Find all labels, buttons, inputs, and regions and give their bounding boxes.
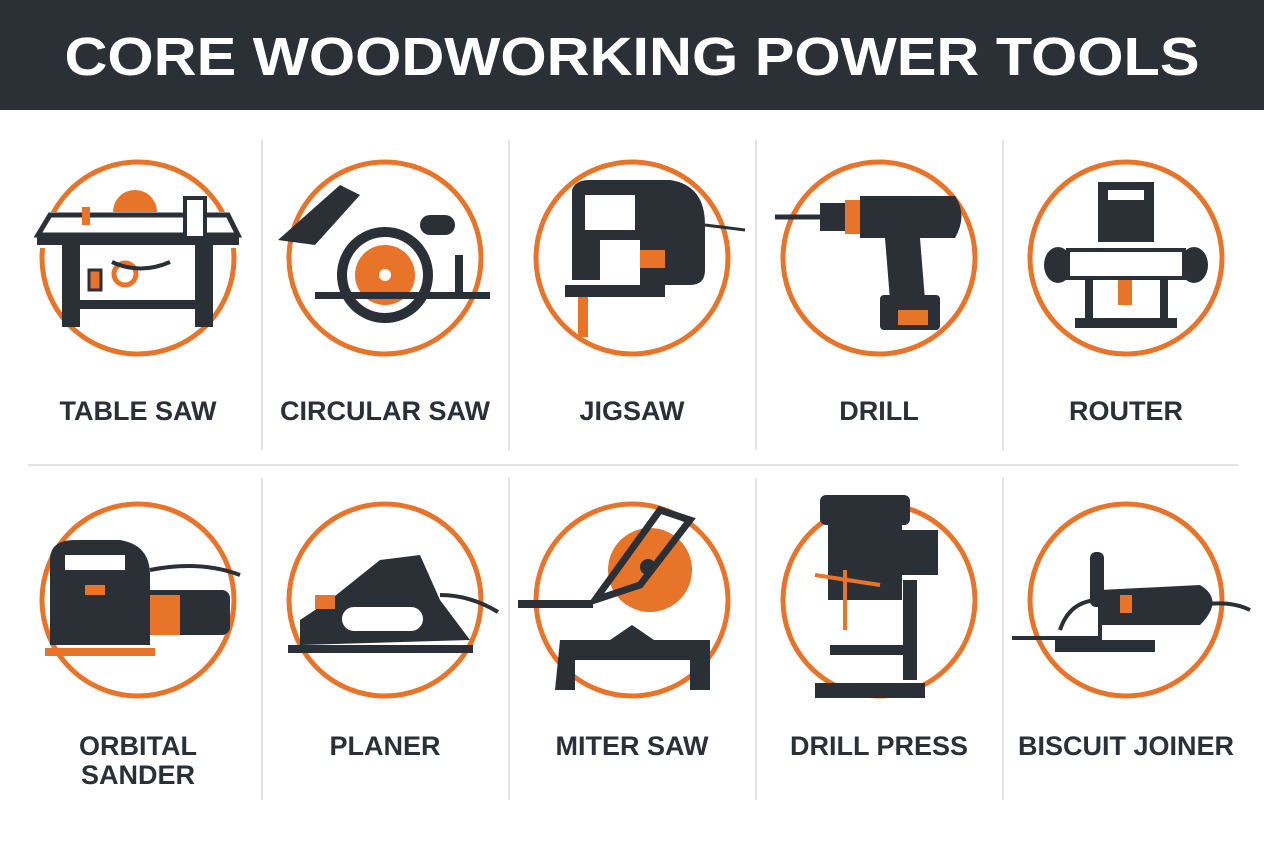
icon: jigsaw xyxy=(565,180,745,337)
panel: router xyxy=(1030,162,1222,426)
label: drill press: DRILL PRESS xyxy=(790,731,968,761)
label: router: ROUTER xyxy=(1069,396,1183,426)
label: jigsaw: JIGSAW xyxy=(579,396,685,426)
icon: orbital sander xyxy=(45,540,240,656)
icon: circular saw xyxy=(278,185,490,323)
panel: biscuit joiner xyxy=(1012,504,1250,761)
icon: biscuit joiner xyxy=(1012,552,1250,652)
icon: planer xyxy=(288,555,498,653)
icon: drill press xyxy=(815,495,938,698)
label: biscuit joiner: BISCUIT JOINER xyxy=(1018,731,1234,761)
panel: drill press xyxy=(783,495,975,761)
panel: table saw xyxy=(37,162,240,426)
label: orbital sander: SANDER xyxy=(81,760,195,790)
label: table saw: TABLE SAW xyxy=(60,396,217,426)
label: miter saw: MITER SAW xyxy=(556,731,709,761)
icon: drill xyxy=(775,196,962,330)
panel: jigsaw xyxy=(536,162,745,426)
panel: miter saw xyxy=(518,504,728,761)
label: drill: DRILL xyxy=(839,396,919,426)
panel: circular saw xyxy=(278,162,491,426)
icon: table saw xyxy=(37,190,240,327)
icon: router xyxy=(1044,182,1208,328)
title bar: CORE WOODWORKING POWER TOOLS xyxy=(64,27,1199,87)
label: circular saw: CIRCULAR SAW xyxy=(280,396,491,426)
panel: planer xyxy=(288,504,498,761)
title bar xyxy=(0,0,1264,110)
label: orbital sander: ORBITAL xyxy=(79,731,197,761)
icon: miter saw xyxy=(518,510,710,690)
panel: drill xyxy=(775,162,975,426)
panel: orbital sander xyxy=(42,504,240,790)
label: planer: PLANER xyxy=(329,731,441,761)
